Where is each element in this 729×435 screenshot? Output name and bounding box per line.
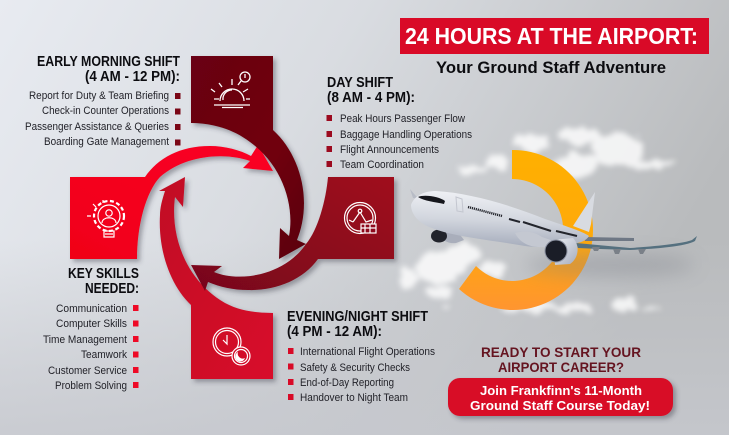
flow diagram — [70, 56, 394, 379]
text block: day shift: Baggage Handling Operations — [340, 129, 472, 141]
orange ring — [459, 150, 593, 310]
text block: evening night shift: End-of-Day Reporting — [300, 377, 394, 389]
text block: evening night shift: EVENING/NIGHT SHIFT — [287, 308, 428, 325]
text block: early morning shift: EARLY MORNING SHIFT — [37, 53, 180, 70]
text block: key skills: Communication — [56, 303, 127, 315]
text block: key skills — [43, 265, 139, 392]
call to action heading: AIRPORT CAREER? — [498, 359, 624, 375]
panel: evening shift — [159, 177, 273, 379]
text block: early morning shift: Check-in Counter Operations — [42, 105, 169, 117]
text block: key skills: Customer Service — [48, 365, 127, 377]
text block: key skills: Computer Skills — [56, 318, 127, 330]
door — [456, 197, 463, 212]
stabilizer — [585, 237, 634, 241]
windows — [468, 207, 502, 216]
panel: day shift — [191, 177, 394, 291]
text block: day shift: Peak Hours Passenger Flow — [340, 113, 465, 125]
text block: day shift — [326, 74, 472, 171]
call to action button: Ground Staff Course Today! — [470, 398, 650, 413]
text block: day shift: Team Coordination — [340, 159, 424, 171]
windshield — [418, 196, 445, 204]
text block: early morning shift: Boarding Gate Management — [44, 136, 169, 148]
icon: gear bulb with person — [87, 200, 124, 237]
left wingtip — [410, 189, 419, 199]
text block: early morning shift: Passenger Assistance & Queries — [25, 121, 169, 133]
title banner — [400, 18, 709, 54]
text block: early morning shift: (4 AM - 12 PM): — [85, 68, 180, 85]
text block: day shift: DAY SHIFT — [327, 74, 393, 91]
call to action button — [448, 378, 673, 416]
plane shadow — [525, 253, 695, 277]
near engine — [553, 238, 578, 265]
text block: early morning shift: Report for Duty & Team Briefing — [29, 90, 169, 102]
call to action heading: READY TO START YOUR — [481, 344, 641, 360]
icon: sunrise with clock — [211, 72, 250, 108]
text block: evening night shift: Handover to Night Team — [300, 392, 408, 404]
panel: early morning shift — [191, 56, 306, 259]
text block: day shift: Flight Announcements — [340, 144, 439, 156]
text block: evening night shift: International Flight Operations — [300, 346, 435, 358]
text block: evening night shift — [287, 308, 435, 404]
wing flaps — [592, 247, 646, 254]
title banner: 24 HOURS AT THE AIRPORT: — [405, 23, 698, 49]
icon: clock and moon — [213, 328, 250, 365]
fuselage — [411, 191, 589, 247]
text block: day shift: (8 AM - 4 PM): — [327, 89, 415, 106]
airplane — [410, 189, 697, 265]
text block: evening night shift: (4 PM - 12 AM): — [287, 323, 382, 340]
text block: evening night shift: Safety & Security Checks — [300, 362, 410, 374]
call to action button: Join Frankfinn's 11-Month — [480, 383, 642, 398]
call to action heading — [481, 344, 641, 375]
text block: key skills: Teamwork — [81, 349, 127, 361]
subtitle: Your Ground Staff Adventure — [436, 58, 666, 77]
text block: key skills: NEEDED: — [85, 280, 139, 297]
far engine — [431, 230, 464, 243]
text block: key skills: Time Management — [43, 334, 127, 346]
text block: key skills: Problem Solving — [55, 380, 127, 392]
icon: schedule network — [344, 202, 376, 234]
text block: early morning shift — [25, 53, 180, 148]
tail fin — [573, 192, 595, 232]
text block: key skills: KEY SKILLS — [68, 265, 139, 282]
cloud group: behind plane — [398, 128, 677, 312]
main wing — [576, 236, 697, 250]
panel: key skills — [70, 145, 273, 259]
wing root — [515, 232, 565, 247]
